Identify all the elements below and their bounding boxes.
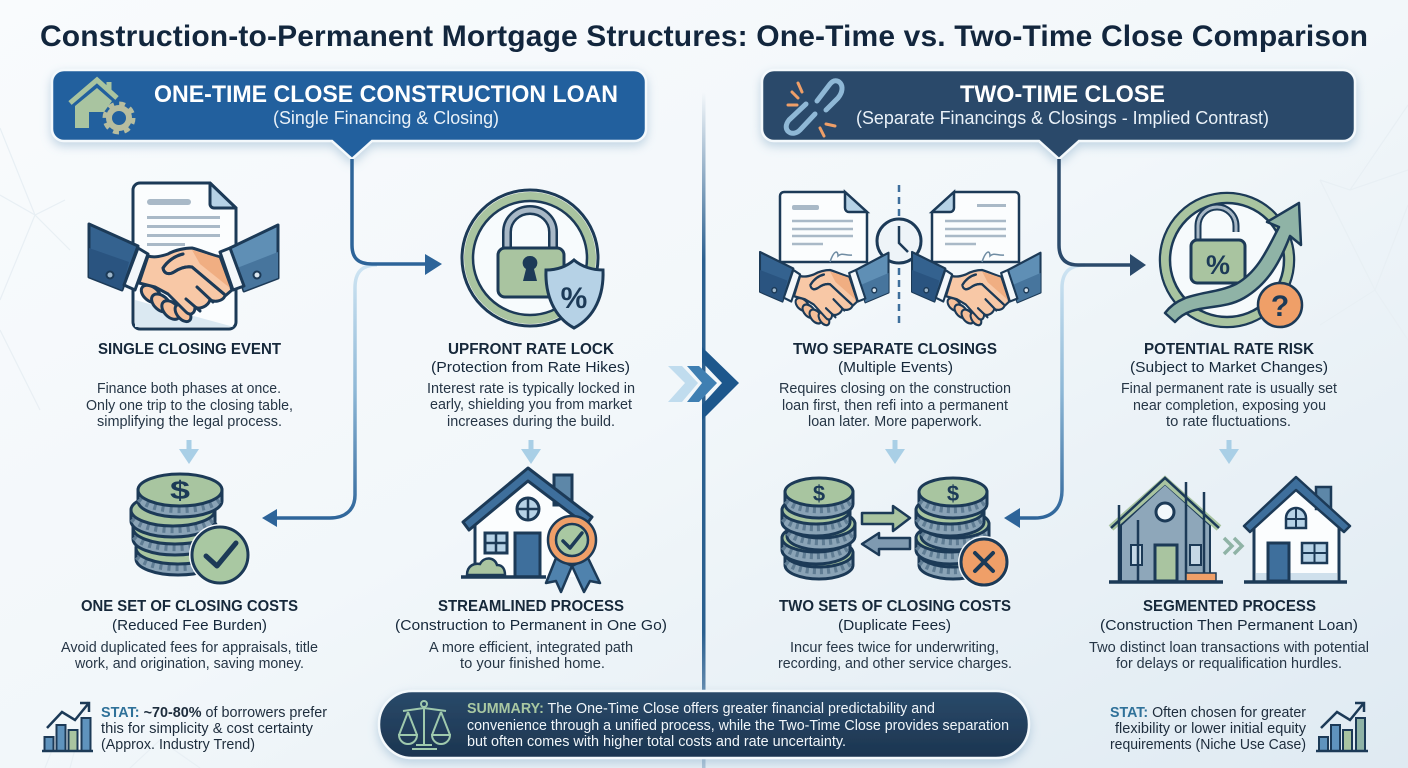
arrow: down left column xyxy=(179,440,199,464)
item: two sets of closing costs xyxy=(778,598,1012,672)
title: Construction-to-Permanent Mortgage Structures: One-Time vs. Two-Time Close Comparison xyxy=(40,20,1368,53)
summary callout: convenience through a unified process, while the Two-Time Close provides separation xyxy=(467,718,1009,734)
arrow: down third column xyxy=(885,440,905,464)
flow arrows: two-time xyxy=(1004,159,1146,528)
item: two separate closings: loan first, then refi into a permanent xyxy=(782,398,1008,414)
summary callout: but often comes with higher total costs and rate uncertainty. xyxy=(467,734,846,750)
item: single closing event xyxy=(86,341,293,430)
icon: broken chain link xyxy=(786,81,842,136)
icon: bar chart with arrow xyxy=(42,703,93,751)
flow arrows: one-time xyxy=(262,159,442,527)
icon: bar chart with arrow xyxy=(1316,703,1368,751)
stat: one-time: this for simplicity & cost certainty xyxy=(101,721,314,737)
icon: open padlock with rising arrow: ? xyxy=(1271,290,1289,323)
item: segmented process: for delays or requalification hurdles. xyxy=(1116,656,1342,672)
item: segmented process: SEGMENTED PROCESS xyxy=(1143,598,1316,615)
item: single closing event: Finance both phases at once. xyxy=(97,381,281,397)
arrow: down right column xyxy=(521,440,541,464)
item: potential rate risk: POTENTIAL RATE RISK xyxy=(1144,341,1314,358)
item: streamlined process: STREAMLINED PROCESS xyxy=(438,598,624,615)
banner: one-time close xyxy=(52,70,646,159)
item: single closing event: simplifying the legal process. xyxy=(97,414,282,430)
item: two separate closings xyxy=(779,341,1011,430)
item: upfront rate lock: early, shielding you from market xyxy=(430,397,632,413)
stat: two-time: requirements (Niche Use Case) xyxy=(1110,737,1306,753)
stat: two-time: STAT: Often chosen for greater xyxy=(1110,705,1306,721)
panel: two-time close xyxy=(760,70,1369,753)
item: potential rate risk: to rate fluctuations. xyxy=(1166,414,1291,430)
icon: two coin stacks exchanging with x xyxy=(782,478,1010,588)
stat: one-time: STAT: ~70-80% of borrowers prefer xyxy=(101,705,327,721)
item: segmented process xyxy=(1089,598,1369,672)
icon: coin stack with check: $ xyxy=(170,475,191,505)
item: upfront rate lock xyxy=(427,341,635,430)
item: two separate closings: Requires closing on the construction xyxy=(779,381,1011,397)
item: single closing event: SINGLE CLOSING EVENT xyxy=(98,341,281,358)
item: upfront rate lock: (Protection from Rate Hikes) xyxy=(431,359,630,376)
item: streamlined process: to your finished home. xyxy=(460,656,605,672)
stat: one-time xyxy=(42,703,327,753)
item: two sets of closing costs: recording, and other service charges. xyxy=(778,656,1012,672)
item: two separate closings: loan later. More paperwork. xyxy=(808,414,982,430)
icon: padlock with shield: % xyxy=(561,282,587,315)
panel: one-time close xyxy=(42,70,667,753)
item: potential rate risk: Final permanent rate is usually set xyxy=(1121,381,1337,397)
icon: house and gear xyxy=(70,80,134,132)
item: two sets of closing costs: TWO SETS OF CLOSING COSTS xyxy=(779,598,1011,615)
item: two separate closings: TWO SEPARATE CLOSINGS xyxy=(793,341,997,358)
item: streamlined process xyxy=(395,598,667,672)
icon: padlock with shield xyxy=(462,190,603,328)
icon: two coin stacks exchanging with x: $ xyxy=(947,481,959,506)
banner: two-time close: (Separate Financings & Closings - Implied Contrast) xyxy=(856,108,1269,128)
item: upfront rate lock: Interest rate is typically locked in xyxy=(427,381,635,397)
banner: one-time close: ONE-TIME CLOSE CONSTRUCTION LOAN xyxy=(154,81,618,108)
item: streamlined process: A more efficient, integrated path xyxy=(429,640,633,656)
icon: house with award badge xyxy=(461,468,600,592)
icon: open padlock with rising arrow xyxy=(1160,193,1302,327)
item: potential rate risk xyxy=(1121,341,1337,430)
icon: balance scale xyxy=(399,701,450,749)
icon: two coin stacks exchanging with x: $ xyxy=(813,481,825,506)
icon: house under construction and finished house xyxy=(1109,477,1350,582)
item: single closing event: Only one trip to the closing table, xyxy=(86,398,293,414)
stat: two-time: flexibility or lower initial equity xyxy=(1115,721,1307,737)
item: one set of closing costs: work, and origination, saving money. xyxy=(74,656,304,672)
arrow: down fourth column xyxy=(1219,440,1239,464)
icon: open padlock with rising arrow: % xyxy=(1206,250,1230,280)
icon: coin stack with check xyxy=(131,474,251,586)
summary callout: SUMMARY: The One-Time Close offers greater financial predictability and xyxy=(467,701,935,717)
item: one set of closing costs: (Reduced Fee Burden) xyxy=(112,617,267,634)
summary callout xyxy=(379,691,1029,758)
banner: two-time close xyxy=(762,70,1355,159)
icon: document and handshake xyxy=(89,183,278,329)
item: potential rate risk: (Subject to Market Changes) xyxy=(1130,359,1328,376)
item: one set of closing costs: ONE SET OF CLOSING COSTS xyxy=(81,598,298,615)
item: one set of closing costs: Avoid duplicated fees for appraisals, title xyxy=(61,640,318,656)
item: two sets of closing costs: (Duplicate Fees) xyxy=(838,617,951,634)
stat: two-time xyxy=(1110,703,1368,753)
banner: one-time close: (Single Financing & Closing) xyxy=(273,108,499,128)
item: one set of closing costs xyxy=(61,598,318,672)
item: two separate closings: (Multiple Events) xyxy=(838,359,953,376)
center divider with chevrons xyxy=(668,92,739,768)
icon: two documents, clock and two handshakes xyxy=(760,185,1041,328)
item: upfront rate lock: increases during the build. xyxy=(447,414,615,430)
item: streamlined process: (Construction to Permanent in One Go) xyxy=(395,617,667,634)
banner: two-time close: TWO-TIME CLOSE xyxy=(960,81,1165,108)
item: segmented process: Two distinct loan transactions with potential xyxy=(1089,640,1369,656)
item: segmented process: (Construction Then Permanent Loan) xyxy=(1100,617,1358,634)
item: upfront rate lock: UPFRONT RATE LOCK xyxy=(448,341,614,358)
item: potential rate risk: near completion, exposing you xyxy=(1133,398,1326,414)
stat: one-time: (Approx. Industry Trend) xyxy=(101,737,255,753)
item: two sets of closing costs: Incur fees twice for underwriting, xyxy=(790,640,999,656)
